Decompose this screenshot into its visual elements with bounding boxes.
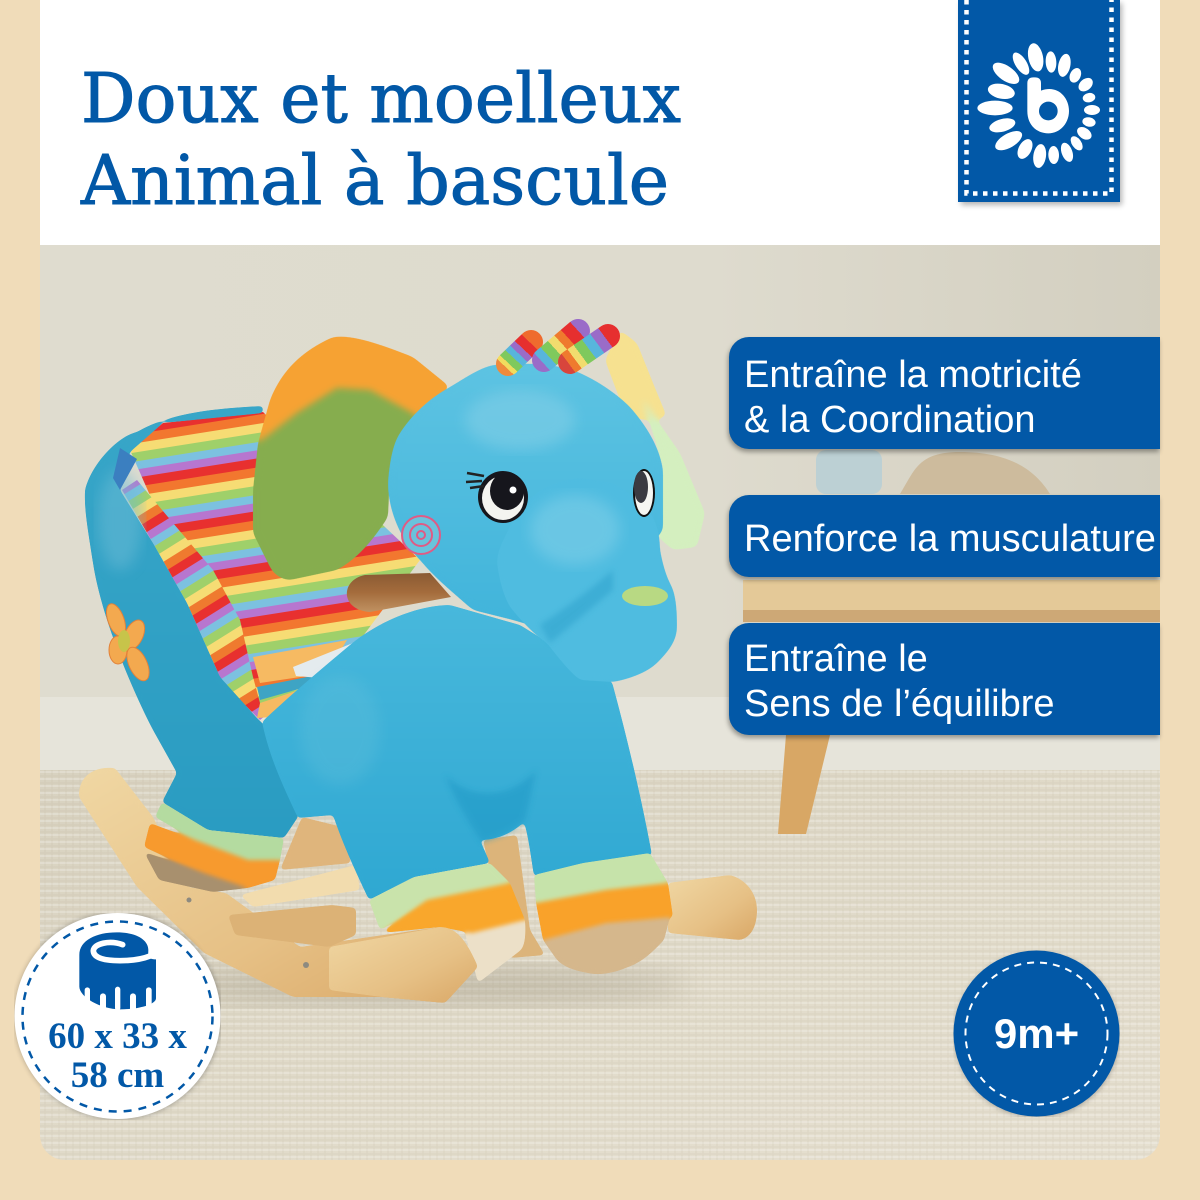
feature: muscles: Renforce la musculature: [744, 518, 1156, 560]
rocker foot block and front tip: [186, 898, 478, 1003]
feature: balance: Sens de l’équilibre: [744, 683, 1055, 725]
elephant front left foot: [369, 863, 525, 983]
elephant ears: [253, 330, 705, 580]
size badge: [14, 913, 221, 1120]
feature: motor skills: Entraîne la motricité: [744, 354, 1082, 396]
feature: balance: Entraîne le: [744, 638, 928, 680]
badge text: 60 x 33 x: [48, 1016, 187, 1057]
logo tag: [958, 0, 1126, 208]
wooden rocker: [79, 768, 757, 1003]
icon: tape measure: [79, 932, 156, 1012]
feature: motor skills: [729, 337, 1160, 449]
age badge: [953, 950, 1120, 1117]
feature: motor skills: & la Coordination: [744, 399, 1036, 441]
feature: muscles: [729, 495, 1160, 577]
icon: sunflower logo: [977, 42, 1100, 169]
title: [80, 60, 681, 221]
elephant back foot: [144, 802, 284, 892]
badge text: [48, 1016, 187, 1096]
elephant rainbow tufts: [508, 331, 608, 364]
elephant seat rainbow panel: [122, 412, 420, 720]
elephant body: [262, 605, 652, 900]
elephant front right foot: [534, 853, 673, 974]
badge text: 58 cm: [71, 1055, 164, 1096]
title: Doux et moelleux: [81, 60, 681, 139]
elephant seat shell: [85, 406, 300, 838]
age text: 9m+: [994, 1010, 1079, 1057]
title: Animal à bascule: [81, 142, 669, 221]
elephant head and trunk: [388, 364, 677, 682]
elephant handle: [347, 573, 451, 612]
feature: balance: [729, 623, 1160, 735]
